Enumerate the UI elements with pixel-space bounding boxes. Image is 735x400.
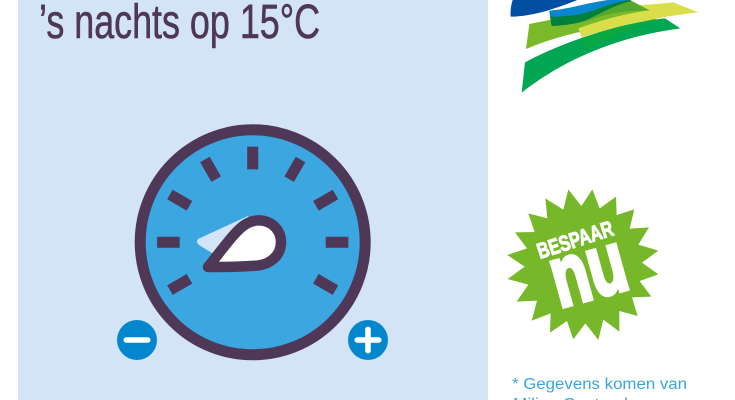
badge text: nu: nu bbox=[538, 212, 637, 326]
badge text: BESPAAR: BESPAAR bbox=[534, 216, 616, 264]
icon: minus button bbox=[117, 320, 157, 360]
dial tick marks bbox=[157, 147, 348, 295]
footnote: * Gegevens komen van bbox=[512, 376, 687, 393]
icon: thermostat dial bbox=[140, 130, 365, 355]
needle shadow bbox=[197, 216, 262, 253]
icon: plus button bbox=[348, 320, 388, 360]
badge: bespaar nu bbox=[507, 189, 658, 340]
footnote bbox=[512, 376, 687, 400]
panel: light blue background bbox=[18, 0, 488, 400]
needle pointer bbox=[208, 220, 281, 267]
logo: coloured ribbons bbox=[511, 0, 698, 93]
badge starburst bbox=[507, 189, 658, 340]
